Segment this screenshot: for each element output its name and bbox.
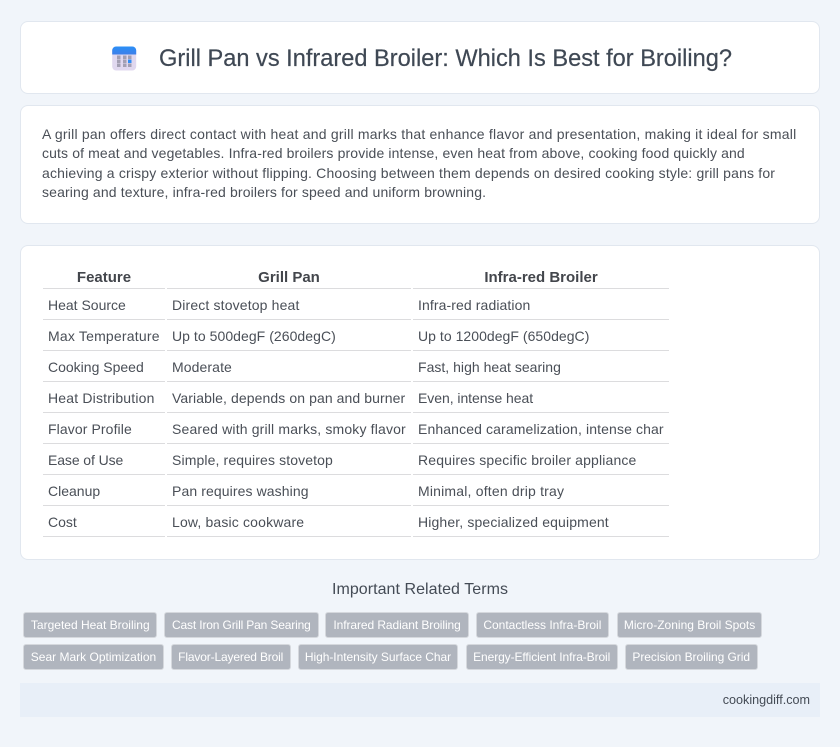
table: Heat Distribution <box>48 390 155 406</box>
table: Heat Source <box>48 297 126 313</box>
related terms tags: Precision Broiling Grid <box>632 650 750 664</box>
intro text: achieving a crispy exterior without flipping. Choosing between them depends on desired cooking style: grill pans for <box>42 165 775 181</box>
related terms tags: Infrared Radiant Broiling <box>333 618 461 632</box>
related terms tags: Flavor-Layered Broil <box>178 650 283 664</box>
table: Moderate <box>172 359 232 375</box>
table: Cooking Speed <box>48 359 144 375</box>
table: Cleanup <box>48 483 100 499</box>
related terms tags: High-Intensity Surface Char <box>305 650 451 664</box>
table: Variable, depends on pan and burner <box>172 390 405 406</box>
table: Flavor Profile <box>48 421 132 437</box>
header panel <box>20 21 820 94</box>
table: Simple, requires stovetop <box>172 452 333 468</box>
intro text: cuts of meat and vegetables. Infra-red broilers provide intense, even heat from above, cooking food quickly and <box>42 145 745 161</box>
table: Infra-red radiation <box>418 297 530 313</box>
intro text: A grill pan offers direct contact with heat and grill marks that enhance flavor and presentation, making it ideal for small <box>42 126 796 142</box>
table: Low, basic cookware <box>172 514 304 530</box>
icon: calendar <box>112 46 136 70</box>
related terms tags: Micro-Zoning Broil Spots <box>624 618 755 632</box>
footer bar <box>20 683 820 717</box>
table: Grill Pan <box>258 269 320 286</box>
intro panel <box>20 105 820 224</box>
comparison table panel <box>20 245 820 560</box>
title: Grill Pan vs Infrared Broiler: Which Is Best for Broiling? <box>159 46 732 72</box>
table: Direct stovetop heat <box>172 297 300 313</box>
related terms tags: Contactless Infra-Broil <box>483 618 601 632</box>
table <box>43 269 669 537</box>
table: Pan requires washing <box>172 483 309 499</box>
table: Seared with grill marks, smoky flavor <box>172 421 406 437</box>
related terms tags: Targeted Heat Broiling <box>31 618 150 632</box>
table: Even, intense heat <box>418 390 533 406</box>
intro text <box>42 126 796 200</box>
table: Enhanced caramelization, intense char <box>418 421 664 437</box>
table: Infra-red Broiler <box>484 269 598 286</box>
table: Feature <box>77 269 131 286</box>
related terms tags: Sear Mark Optimization <box>31 650 156 664</box>
table: Up to 1200degF (650degC) <box>418 328 589 344</box>
related terms tags <box>23 612 762 670</box>
related terms tags: Energy-Efficient Infra-Broil <box>473 650 610 664</box>
table: Cost <box>48 514 77 530</box>
footer source: cookingdiff.com <box>723 693 810 707</box>
table: Up to 500degF (260degC) <box>172 328 336 344</box>
table: Ease of Use <box>48 452 123 468</box>
intro text: searing and texture, infra-red broilers for speed and uniform browning. <box>42 184 486 200</box>
table: Max Temperature <box>48 328 160 344</box>
table: Minimal, often drip tray <box>418 483 564 499</box>
table: Requires specific broiler appliance <box>418 452 636 468</box>
related terms heading: Important Related Terms <box>332 581 508 598</box>
related terms tags: Cast Iron Grill Pan Searing <box>172 618 311 632</box>
table: Fast, high heat searing <box>418 359 561 375</box>
table: Higher, specialized equipment <box>418 514 609 530</box>
